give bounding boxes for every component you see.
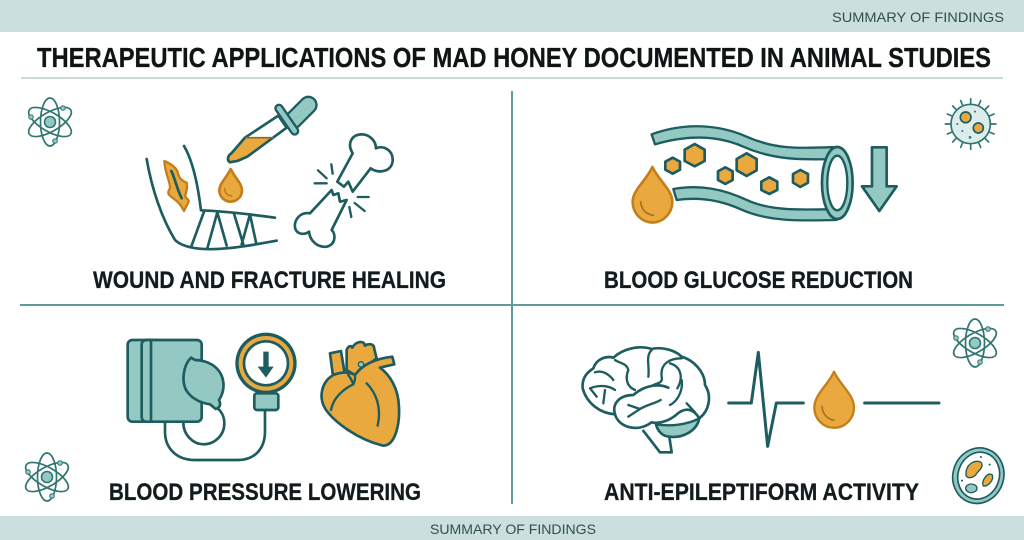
icon: honey drop [633, 167, 672, 222]
icon: atom bottom left [21, 453, 73, 501]
panel: blood pressure lowering [109, 333, 421, 506]
panel: wound and fracture healing [93, 105, 446, 294]
icon: blood vessel [652, 126, 853, 220]
top banner [0, 0, 1024, 32]
panel: blood glucose reduction [604, 126, 913, 294]
bottom banner: SUMMARY OF FINDINGS [430, 521, 596, 537]
panel: anti-epileptiform activity [583, 347, 939, 506]
icon: honey drop [219, 169, 242, 202]
icon: honey dropper [228, 105, 308, 162]
top banner: SUMMARY OF FINDINGS [832, 9, 1004, 25]
heading: wound and fracture healing: WOUND AND FRACTURE HEALING [93, 267, 446, 294]
icon: pressure gauge [235, 333, 297, 410]
icon: honey drop [814, 372, 854, 428]
icon: atom right [949, 319, 1001, 367]
icon: fractured bone [295, 134, 393, 247]
icon: heart [322, 342, 399, 446]
icon: blood pressure cuff and bulb [128, 340, 265, 460]
heading: blood pressure lowering: BLOOD PRESSURE LOWERING [109, 479, 421, 506]
heading: anti-epileptiform activity: ANTI-EPILEPTIFORM ACTIVITY [604, 479, 919, 506]
heading: blood glucose reduction: BLOOD GLUCOSE REDUCTION [604, 267, 913, 294]
icon: atom top left [24, 98, 76, 146]
bottom banner [0, 516, 1024, 540]
icon: glucose hexagons [665, 144, 808, 194]
icon: petri dish cell [946, 441, 1011, 510]
icon: bandaged arm with wound [147, 146, 277, 249]
icon: down arrow [862, 147, 897, 211]
icon: pulse trace [729, 352, 939, 446]
icon: bacterium cell [945, 99, 996, 149]
icon: brain [583, 347, 709, 452]
